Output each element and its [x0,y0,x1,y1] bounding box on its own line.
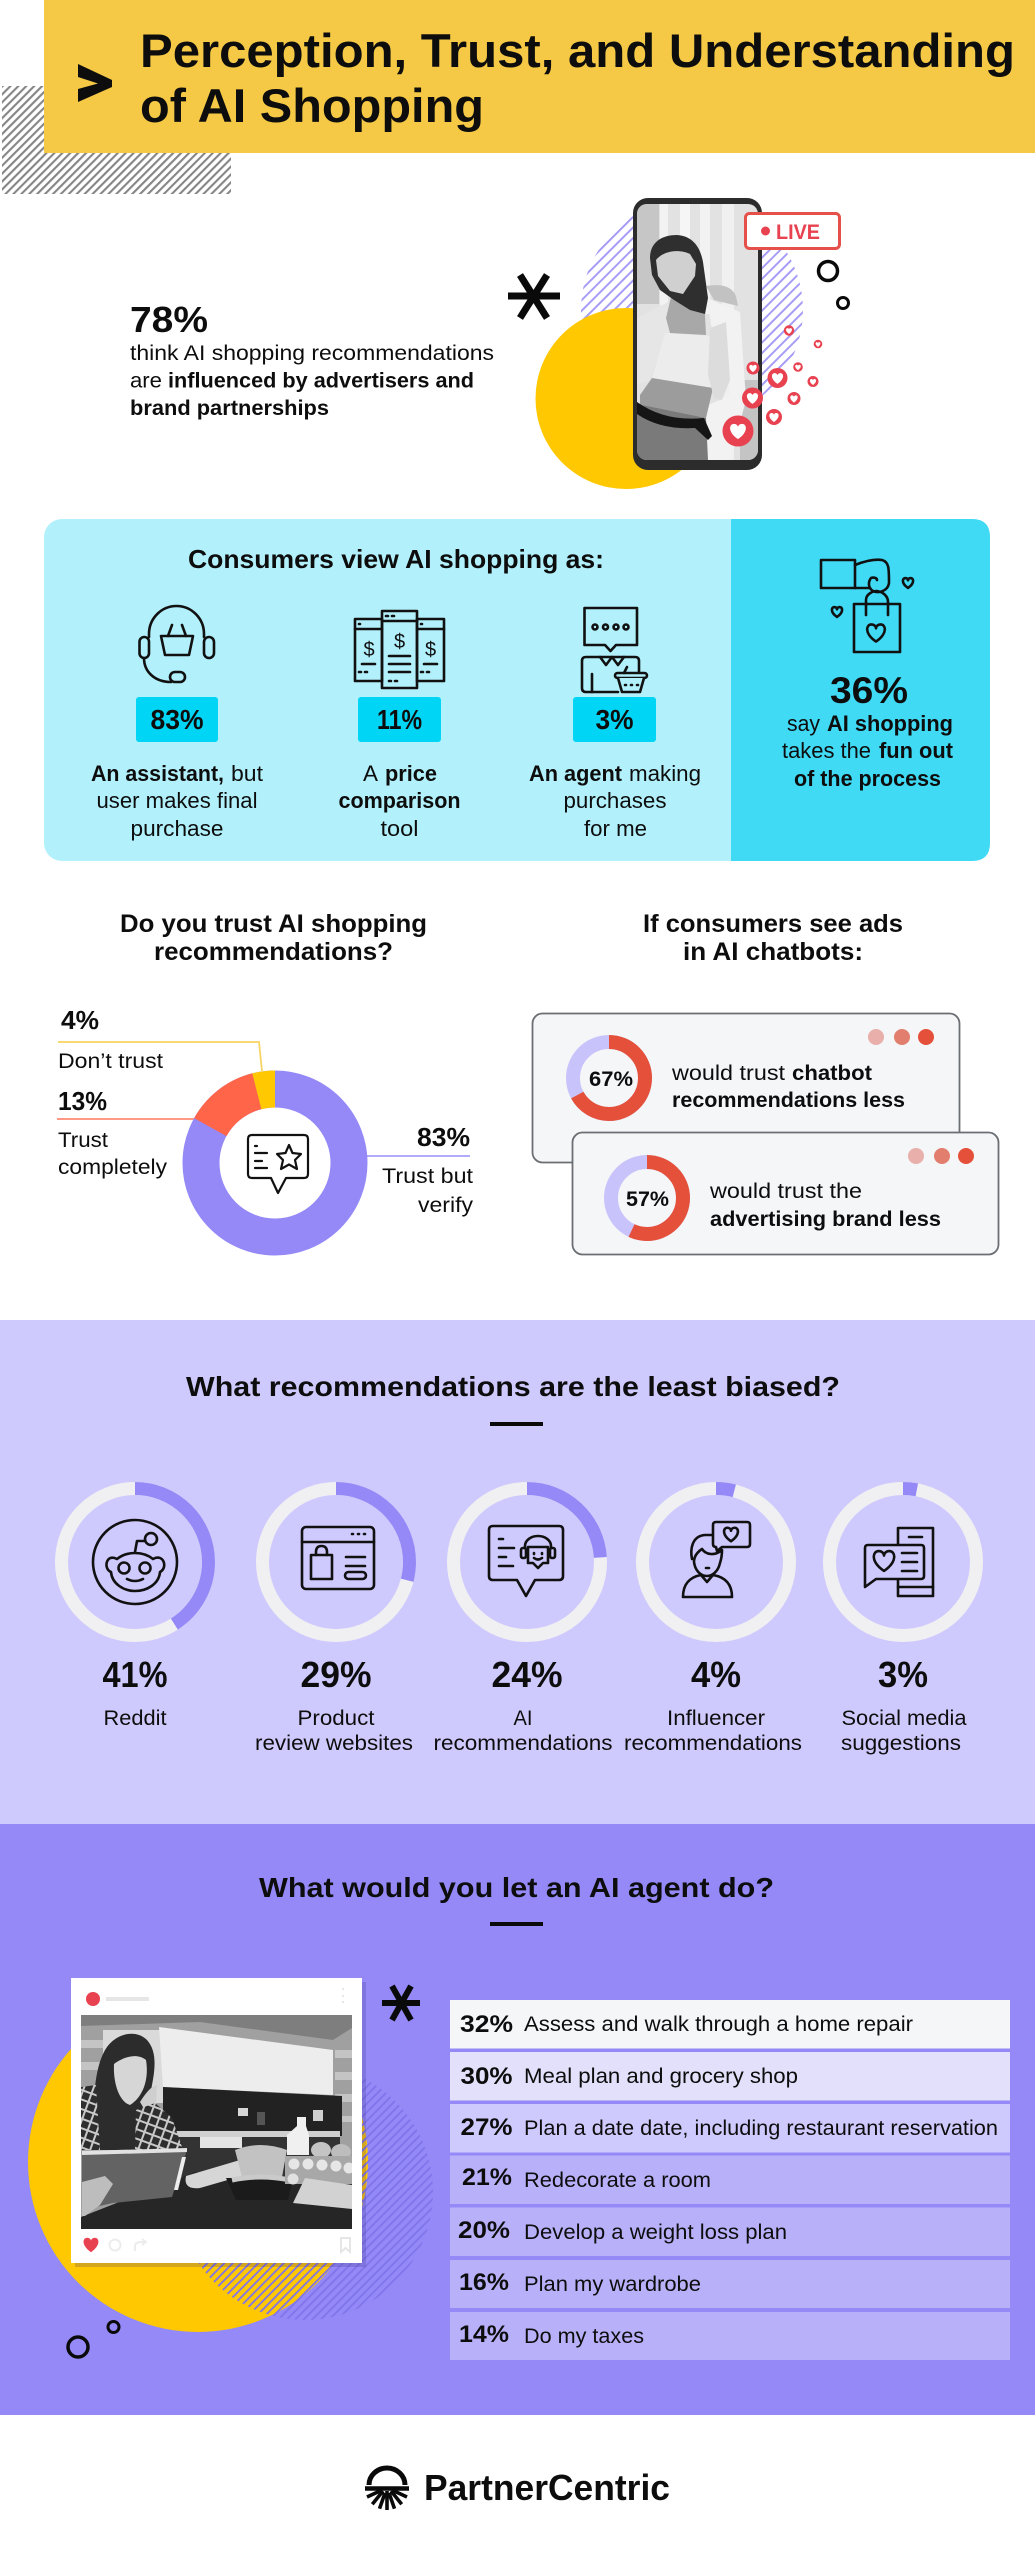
label: 13% trust completely: Trust [58,1128,108,1152]
label: 4% don't trust [58,1005,163,1073]
icon: social bubble and phone [865,1528,933,1596]
stat: 36%: say [787,711,820,736]
pct: 83%: 83% [150,704,204,735]
pct: 83% [136,697,218,742]
item: AI recommendations 24%: AI [514,1706,532,1730]
heading: ads in chatbots: If consumers see ads [643,910,903,938]
panel: let an AI agent do [0,1824,1035,2415]
icon: price comparison [355,611,444,688]
row: 21% [450,2156,1010,2204]
item: product review 29%: Product [298,1706,375,1730]
heading: ads in chatbots [643,910,903,966]
stat: 36%: AI shopping [827,711,953,736]
plaid shirt [81,2085,183,2150]
icon: like comment share save [84,2238,350,2252]
stat: 78% influenced by advertisers: think AI shopping recommendations [130,341,494,365]
item: influencer 4% [624,1488,802,1755]
stat: 78% influenced by advertisers: are [130,368,162,392]
tablet [82,2150,187,2210]
card: trust chatbot less: recommendations less [672,1088,905,1112]
pct: 3% [573,697,656,742]
caption: agent: making [629,761,701,786]
label: 83% trust but verify: Trust but [382,1164,473,1188]
title: of AI Shopping [140,79,484,132]
stat: 78% influenced by advertisers: 78% [130,299,208,340]
pct: 11% [358,697,441,742]
caption: agent: for me [584,816,647,841]
midriff [640,378,713,418]
card: trust chatbot less: chatbot [792,1061,872,1085]
hair [650,235,708,314]
icon: product site [302,1527,374,1589]
row: 14%: Do my taxes [524,2325,644,2348]
row: 32%: Assess and walk through a home repair [524,2013,913,2036]
title: Perception, Trust, and Understanding [140,24,1015,77]
heading: trust question: recommendations? [154,938,393,966]
icon: chevron [78,64,112,102]
caption: price comparison [338,761,460,841]
icon: review bubble with star [248,1135,308,1193]
backsplash [163,2087,342,2136]
item: social media 3%: Social media [842,1706,967,1730]
item: influencer 4%: Influencer [667,1706,765,1730]
hatched circle [581,199,803,421]
row: 32% [450,2000,1010,2048]
caption: price comparison: comparison [338,788,460,813]
item: social media 3%: suggestions [841,1731,961,1755]
row: 20%: 20% [458,2217,510,2244]
heading: What recommendations are the least biased? [186,1371,840,1402]
logo: PartnerCentric: PartnerCentric [424,2467,670,2508]
stat: 36%: 36% [830,670,908,711]
caption: agent [529,761,701,841]
counter [175,2131,340,2137]
label: 13% trust completely: completely [58,1155,167,1179]
icon: price comparison: $ [425,639,436,661]
heading: What would you let an AI agent do? [259,1872,774,1903]
row: 21%: 21% [462,2164,512,2191]
item: social media 3% [830,1488,976,1755]
card: trust chatbot less [532,1014,960,1162]
row: 14%: 14% [459,2321,509,2348]
left cabinet [103,2030,163,2103]
row: 32%: 32% [460,2011,513,2038]
face [656,251,696,294]
icon: price comparison: $ [363,639,375,661]
item: Reddit 41%: 41% [102,1654,168,1695]
row: 14% [450,2312,1010,2360]
buns and eggs [311,2142,331,2156]
stat: 36%: of the process [794,766,941,791]
caption: assistant: An assistant, [91,761,224,786]
item: product review 29% [255,1488,413,1755]
title [140,24,1015,132]
cabinets [159,2027,333,2095]
caption: assistant: purchase [130,816,224,841]
row: 27% [450,2104,1010,2152]
illustration: phone with live stream [508,198,848,489]
icon: Reddit mascot [93,1520,177,1604]
phone [633,198,762,470]
row: 20% [450,2208,1010,2256]
belt [637,402,712,440]
baguette [186,2160,245,2188]
live badge: LIVE [776,221,820,244]
stat: 36%: fun out [879,738,954,763]
hand on cheek [140,2085,157,2108]
item: AI recommendations 24%: 24% [492,1654,562,1695]
caption: price comparison: A [363,761,378,786]
card: trust chatbot less: would trust [671,1061,785,1085]
arm [708,322,730,400]
card: trust brand less [572,1132,998,1254]
item: Reddit 41% [62,1488,208,1730]
heading: Consumers view AI shopping as: [188,544,604,574]
list: agent tasks [450,2000,1010,2360]
caption: agent: An agent [529,761,623,786]
chair [706,285,738,306]
row: 16%: 16% [459,2269,509,2296]
icon: headset with basket [140,606,214,682]
card: trust brand less: would trust the [709,1179,862,1203]
stat: 36% [782,670,954,791]
stat: 78% influenced by advertisers [130,299,494,420]
row: 21%: Redecorate a room [524,2169,711,2192]
row: 27%: Plan a date date, including restaurant reservation [524,2117,998,2140]
hatched backdrop behind title banner [2,86,231,194]
item: AI recommendations 24% [434,1488,612,1755]
package [293,2178,352,2209]
item: influencer 4%: 4% [691,1654,741,1695]
row: 27%: 27% [460,2114,512,2141]
caption: assistant: but [231,761,263,786]
row: 30%: Meal plan and grocery shop [524,2065,798,2088]
title banner [44,0,1035,153]
yellow circle [536,308,716,489]
milk bottle [287,2117,309,2155]
heading: trust question: Do you trust AI shopping [120,910,427,938]
face [114,2056,147,2105]
item: social media 3%: 3% [878,1654,928,1695]
stat: 78% influenced by advertisers: brand partnerships [130,396,329,420]
crop top [652,333,714,388]
caption: price comparison: price [385,761,437,786]
card: trust chatbot less: 67% [589,1068,633,1091]
icon: hand with shopping bag [821,560,913,652]
item: Reddit 41%: Reddit [104,1706,167,1730]
pct: 3%: 3% [596,704,634,735]
post card [71,1978,366,2267]
item: AI recommendations 24%: recommendations [434,1731,612,1755]
pct: 11%: 11% [377,704,422,735]
card: trust brand less: advertising brand less [710,1207,941,1231]
live badge [746,214,840,248]
neck and chest [666,298,706,335]
icon: sunburst mark [365,2468,409,2510]
item: product review 29%: review websites [255,1731,413,1755]
icon: price comparison: $ [394,631,405,653]
illustration: social post with photo [28,1978,433,2357]
stat: 36%: takes the [782,738,871,763]
panel: consumers view AI shopping [44,519,990,861]
woman hair [94,2034,155,2150]
heading: trust question [120,910,427,966]
label: 83% trust but verify: verify [418,1193,473,1217]
label: 13% trust completely [58,1086,167,1179]
label: 4% don't trust: 4% [61,1005,99,1035]
caption: agent: purchases [564,788,666,813]
caption: assistant: user makes final [96,788,258,813]
panel: least biased recommendations [0,1320,1035,1824]
card: trust brand less: 57% [626,1188,669,1211]
rings [818,262,838,280]
icon: AI bubble with bot [489,1526,563,1596]
label: 83% trust but verify [382,1122,473,1217]
stat: 78% influenced by advertisers: influenced by advertisers and [168,368,474,392]
jeans [637,404,708,460]
row: 30%: 30% [460,2063,512,2090]
row: 20%: Develop a weight loss plan [524,2221,787,2244]
icon: asterisk [382,1986,420,2020]
row: 16%: Plan my wardrobe [524,2273,701,2296]
shirt [660,302,668,314]
leader lines [58,1042,262,1071]
donut chart: trust [57,1042,470,1237]
row: 30% [450,2052,1010,2100]
table [81,2172,352,2229]
label: 83% trust but verify: 83% [417,1122,470,1152]
heading: ads in chatbots: in AI chatbots: [683,938,863,966]
item: product review 29%: 29% [300,1654,372,1695]
icon: influencer [683,1522,750,1597]
label: 4% don't trust: Don’t trust [58,1049,163,1073]
salad bowl [235,2145,287,2177]
hand [82,2176,113,2216]
icon: agent with basket [582,608,647,692]
label: 13% trust completely: 13% [58,1086,107,1116]
icon: asterisk [508,275,560,318]
caption: assistant [91,761,263,841]
caption: price comparison: tool [380,816,418,841]
row: 16% [450,2260,1010,2308]
item: influencer 4%: recommendations [624,1731,802,1755]
icon: floating hearts [722,325,822,446]
